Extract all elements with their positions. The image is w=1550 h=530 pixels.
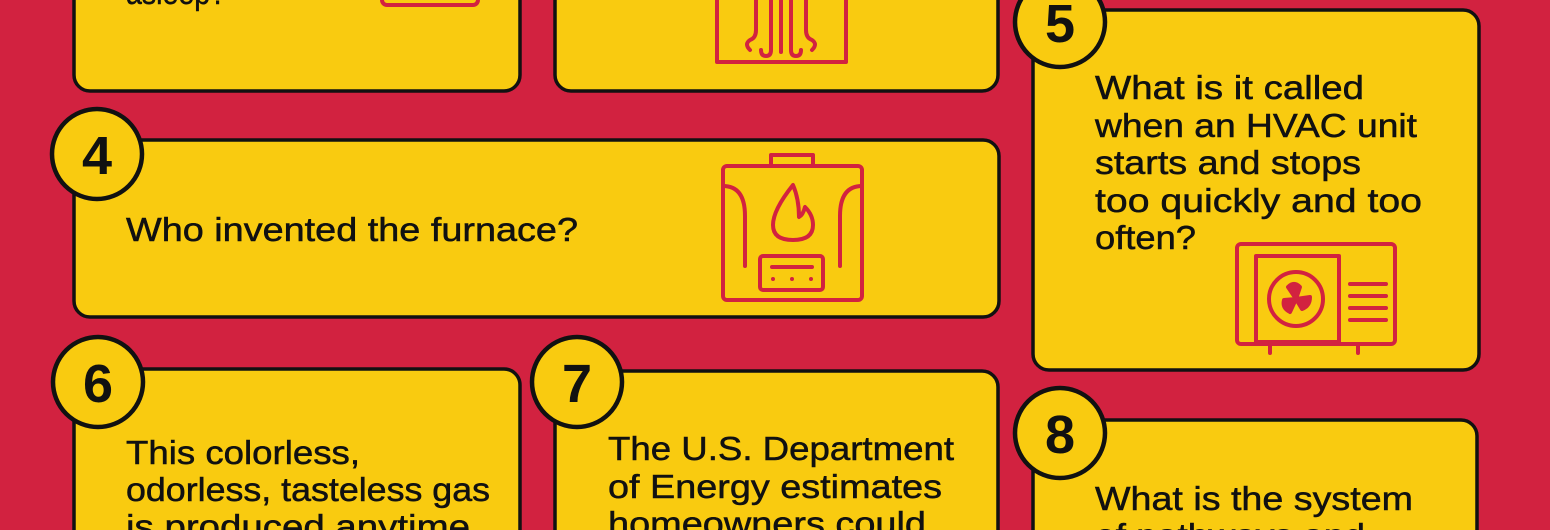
text: question 6	[126, 434, 490, 530]
number badge 5	[1015, 0, 1105, 67]
panel: question 6	[53, 337, 520, 530]
number badge 7: 7	[562, 354, 592, 414]
panel: question 8	[1015, 388, 1477, 530]
icon: furnace	[723, 155, 862, 300]
text: question 7: of Energy estimates	[608, 468, 942, 505]
number badge 6: 6	[83, 354, 113, 414]
text: question 5: starts and stops	[1095, 144, 1361, 181]
icon: partial device	[382, 0, 478, 5]
text: question 5: What is it called	[1095, 69, 1364, 106]
text: question 5: often?	[1095, 219, 1196, 256]
number badge 8	[1015, 388, 1105, 478]
number badge 8: 8	[1045, 405, 1075, 465]
text: question 5	[1094, 69, 1422, 256]
text: question 5: too quickly and too	[1095, 182, 1422, 219]
text: question 4: Who invented the furnace?	[126, 211, 578, 248]
panel: question 7	[532, 337, 998, 530]
text: question 5: when an HVAC unit	[1094, 107, 1417, 144]
panel: question 5	[1015, 0, 1479, 370]
text: question 7	[608, 430, 954, 530]
text: question 8: What is the system	[1095, 480, 1413, 517]
panel: question 3 (partial, top-middle)	[555, 0, 998, 91]
text: question 7: The U.S. Department	[608, 430, 954, 467]
text: question 6: This colorless,	[126, 434, 360, 471]
panel: question 4	[52, 109, 999, 317]
number badge 7	[532, 337, 622, 427]
panel: question 2 (partial, top-left)	[74, 0, 520, 91]
text: question 8	[1095, 480, 1413, 530]
number badge 6	[53, 337, 143, 427]
icon: AC condenser unit	[1237, 244, 1395, 353]
text: question 6: odorless, tasteless gas	[126, 471, 490, 508]
number badge 4: 4	[82, 126, 112, 186]
number badge 4	[52, 109, 142, 199]
icon: heater with wires	[717, 0, 846, 62]
